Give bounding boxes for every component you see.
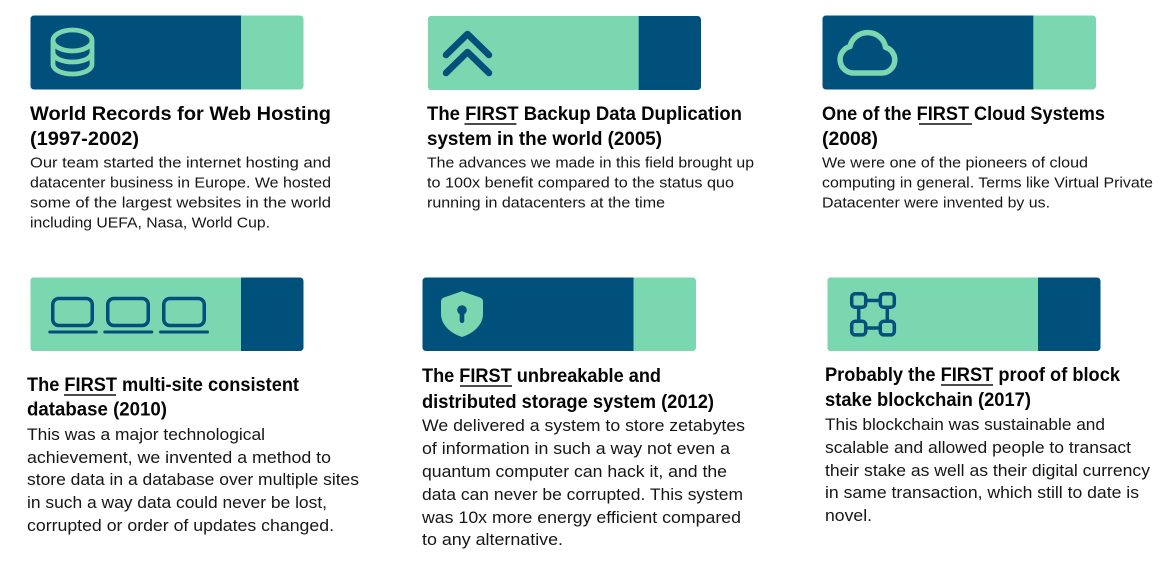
icon: cloud: [840, 33, 895, 73]
body text: [825, 415, 1151, 525]
body text: Our team started the internet hosting and: [30, 155, 331, 172]
body text: We delivered a system to store zetabytes: [422, 416, 745, 435]
panel: world records for web hosting: [30, 16, 331, 232]
panel: cloud systems: [822, 16, 1153, 212]
body text: to 100x benefit compared to the status quo: [427, 175, 734, 192]
heading: The FIRST multi-site consistent: [27, 374, 299, 396]
banner: navy and green bar: [822, 16, 1096, 90]
heading: The FIRST Backup Data Duplication: [427, 103, 742, 125]
body text: Datacenter were invented by us.: [822, 195, 1050, 212]
heading: One of the FIRST Cloud Systems: [822, 103, 1105, 125]
body text: achievement, we invented a method to: [27, 448, 331, 467]
heading: [825, 364, 1120, 411]
banner: green and navy bar: [428, 16, 701, 90]
banner: navy and green bar: [30, 16, 304, 90]
heading: system in the world (2005): [427, 128, 662, 150]
body text: of information in such a way not even a: [422, 439, 731, 458]
body text: store data in a database over multiple sites: [27, 470, 359, 489]
icon: database: [53, 30, 92, 74]
banner: green and navy bar: [828, 278, 1100, 351]
body text: their stake as well as their digital currency: [825, 461, 1151, 480]
heading: Probably the FIRST proof of block: [825, 364, 1120, 386]
body text: [427, 155, 754, 212]
body text: scalable and allowed people to transact: [825, 438, 1131, 457]
heading: [422, 365, 714, 413]
panel: proof of block stake blockchain: [825, 278, 1151, 525]
heading: The FIRST unbreakable and: [422, 365, 661, 387]
body text: including UEFA, Nasa, World Cup.: [30, 215, 270, 232]
icon: three laptops: [50, 298, 207, 332]
body text: in same transaction, which still to date is: [825, 483, 1139, 502]
body text: This was a major technological: [27, 425, 265, 444]
heading: (1997-2002): [30, 128, 139, 150]
heading: [30, 103, 331, 150]
panel: multi-site consistent database: [27, 278, 359, 535]
body text: [421, 416, 745, 549]
panel: unbreakable distributed storage: [421, 278, 745, 549]
body text: data can never be corrupted. This system: [422, 485, 743, 504]
panel: backup data duplication: [427, 16, 754, 212]
body text: quantum computer can hack it, and the: [422, 462, 727, 481]
body text: [822, 155, 1153, 212]
body text: in such a way data could never be lost,: [27, 493, 327, 512]
heading: distributed storage system (2012): [422, 391, 714, 413]
banner: navy and green bar: [422, 278, 696, 351]
banner: green and navy bar: [30, 278, 304, 351]
heading: database (2010): [27, 399, 167, 421]
heading: [427, 103, 742, 150]
body text: to any alternative.: [422, 530, 563, 549]
heading: stake blockchain (2017): [825, 389, 1031, 411]
body text: running in datacenters at the time: [427, 195, 665, 212]
body text: The advances we made in this field brought up: [427, 155, 754, 172]
heading: [27, 374, 299, 421]
body text: This blockchain was sustainable and: [825, 415, 1105, 434]
body text: some of the largest websites in the world: [30, 195, 331, 212]
body text: computing in general. Terms like Virtual Private: [822, 175, 1153, 192]
body text: novel.: [825, 506, 872, 525]
body text: was 10x more energy efficient compared: [421, 508, 741, 527]
body text: [27, 425, 359, 535]
body text: We were one of the pioneers of cloud: [822, 155, 1088, 172]
body text: corrupted or order of updates changed.: [27, 516, 334, 535]
icon: connected nodes: [852, 294, 894, 335]
icon: double chevron up: [446, 34, 489, 73]
heading: World Records for Web Hosting: [30, 103, 331, 125]
heading: (2008): [822, 128, 878, 150]
icon: shield with keyhole: [441, 291, 483, 337]
body text: datacenter business in Europe. We hosted: [30, 175, 331, 192]
heading: [822, 103, 1105, 150]
body text: [30, 155, 331, 232]
